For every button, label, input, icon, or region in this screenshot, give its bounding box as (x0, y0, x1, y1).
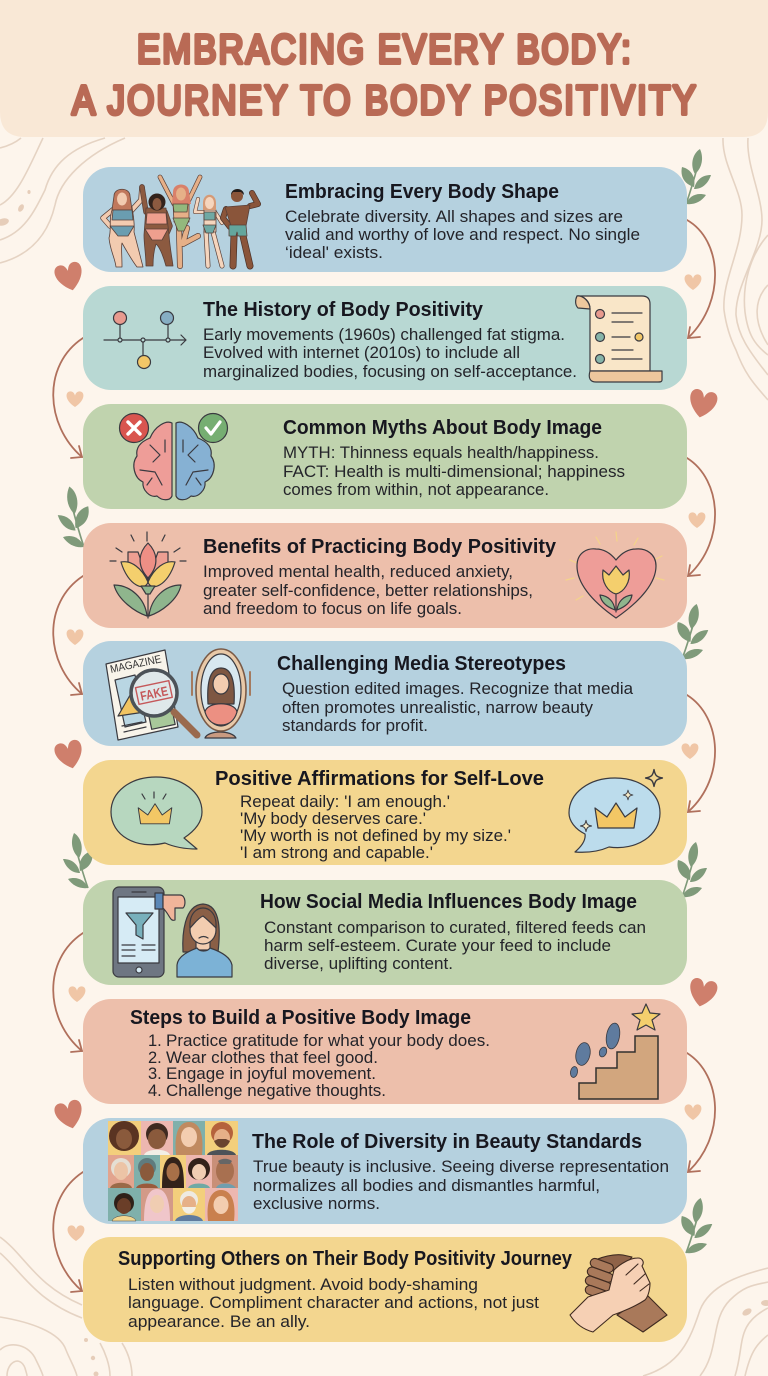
icon: green speech bubble with crown (111, 777, 202, 849)
icon: magazine and magnifier: FAKE (139, 683, 170, 704)
figure b (142, 187, 173, 266)
header band with title (0, 0, 768, 137)
numbered list: 3. (148, 1065, 162, 1083)
arrow: card 7 to 8 (53, 933, 83, 1052)
text block: Early movements (1960s) challenged fat stigma. (203, 326, 565, 344)
heading: Benefits of Practicing Body Positivity (203, 535, 557, 558)
numbered list: 1. (148, 1032, 162, 1050)
text block: greater self-confidence, better relationships, (203, 582, 533, 600)
decorative leaf sprigs (58, 149, 712, 1253)
arrow: card 5 to 6 (687, 695, 715, 812)
heading: Challenging Media Stereotypes (277, 652, 566, 675)
icon: brain with cross and check (120, 414, 228, 500)
numbered list: Engage in joyful movement. (166, 1065, 376, 1083)
icon: clasped hands (570, 1255, 667, 1332)
figure d (195, 195, 222, 266)
text block (283, 444, 625, 499)
text block: comes from within, not appearance. (283, 481, 549, 499)
text block (285, 208, 640, 262)
icon: scroll (576, 296, 662, 382)
heading: How Social Media Influences Body Image (260, 890, 637, 913)
text block: Improved mental health, reduced anxiety, (203, 563, 513, 581)
text block: 'My worth is not defined by my size.' (240, 827, 511, 845)
text block: FACT: Health is multi-dimensional; happiness (283, 463, 625, 481)
text block: valid and worthy of love and respect. No single (285, 226, 640, 244)
numbered list: Practice gratitude for what your body does. (166, 1032, 490, 1050)
text block: diverse, uplifting content. (264, 955, 453, 973)
panel: social media (83, 880, 687, 985)
text block: Repeat daily: 'I am enough.' (240, 793, 450, 811)
text block: Question edited images. Recognize that media (282, 680, 634, 698)
text block: normalizes all bodies and dismantles harmful, (253, 1177, 600, 1195)
heading: Steps to Build a Positive Body Image (130, 1006, 471, 1029)
icon: phone with filter and sad person (113, 887, 232, 977)
arrow: card 3 to 4 (687, 458, 715, 576)
heading: Supporting Others on Their Body Positivity Journey (118, 1247, 573, 1270)
text block: Celebrate diversity. All shapes and sizes are (285, 208, 623, 226)
arrow: card 9 to 10 (53, 1172, 83, 1292)
text block: True beauty is inclusive. Seeing diverse representation (253, 1158, 669, 1176)
panel: challenging media stereotypes (83, 641, 687, 746)
panel: history of body positivity (83, 286, 687, 390)
icon: heart with flower (566, 532, 664, 618)
arrow: card 1 to 2 (687, 220, 715, 338)
arrow: card 2 to 3 (53, 338, 83, 458)
heading: Positive Affirmations for Self-Love (215, 767, 544, 790)
panel: role of diversity (83, 1118, 687, 1224)
icon: blue speech bubble with crown (569, 770, 662, 852)
heading: Common Myths About Body Image (283, 416, 602, 439)
text block: and freedom to focus on life goals. (203, 600, 462, 618)
text block: Constant comparison to curated, filtered feeds can (264, 919, 646, 937)
text block (264, 919, 646, 973)
heading: The History of Body Positivity (203, 298, 484, 321)
text block: appearance. Be an ally. (128, 1313, 310, 1331)
icon: footprints up stairs to a star (570, 1004, 660, 1099)
text block: ‘ideal' exists. (285, 244, 383, 262)
text block: harm self-esteem. Curate your feed to include (264, 937, 611, 955)
arrow: card 8 to 9 (687, 1053, 715, 1172)
numbered list: 4. (148, 1082, 162, 1100)
text block: exclusive norms. (253, 1195, 380, 1213)
text block (240, 793, 511, 862)
panel: steps (83, 999, 687, 1104)
panel: positive affirmations (83, 760, 687, 865)
icon: magazine and magnifier (106, 650, 197, 740)
text block: 'I am strong and capable.' (240, 844, 433, 862)
numbered list (148, 1032, 490, 1100)
text block (282, 680, 634, 735)
heading: Embracing Every Body Shape (285, 180, 559, 203)
title: A JOURNEY TO BODY POSITIVITY (72, 78, 696, 124)
panel: supporting others (83, 1237, 687, 1342)
icon: blooming flower (110, 532, 186, 618)
text block (203, 563, 533, 618)
panel: common myths (83, 404, 687, 509)
text block: 'My body deserves care.' (240, 810, 426, 828)
icon: mirror with reflection (192, 649, 250, 738)
panel: embracing every body shape (83, 167, 687, 272)
icon: timeline (104, 312, 186, 368)
text block: marginalized bodies, focusing on self-acceptance. (203, 363, 577, 381)
numbered list: Challenge negative thoughts. (166, 1082, 386, 1100)
numbered list: 2. (148, 1049, 162, 1067)
title (72, 27, 696, 124)
title: EMBRACING EVERY BODY: (137, 27, 631, 73)
arrow: card 4 to 5 (53, 576, 83, 695)
text block: standards for profit. (282, 717, 428, 735)
figure e (223, 189, 258, 266)
icon: portrait grid (108, 1121, 238, 1221)
icon: magazine and magnifier: MAGAZINE (109, 653, 162, 676)
text block (128, 1276, 539, 1331)
text block: Evolved with internet (2010s) to include all (203, 344, 520, 362)
decorative hearts (53, 260, 719, 1241)
text block: Listen without judgment. Avoid body-shaming (128, 1276, 478, 1294)
heading: The Role of Diversity in Beauty Standards (252, 1130, 642, 1153)
text block: language. Compliment character and actions, not just (128, 1294, 539, 1312)
text block: MYTH: Thinness equals health/happiness. (283, 444, 599, 462)
figure a (103, 187, 143, 267)
figure c (160, 177, 200, 266)
text block (253, 1158, 669, 1213)
panel: benefits (83, 523, 687, 628)
text block: often promotes unrealistic, narrow beauty (282, 699, 594, 717)
numbered list: Wear clothes that feel good. (166, 1049, 378, 1067)
icon: group of diverse people (103, 177, 258, 267)
text block (203, 326, 577, 381)
